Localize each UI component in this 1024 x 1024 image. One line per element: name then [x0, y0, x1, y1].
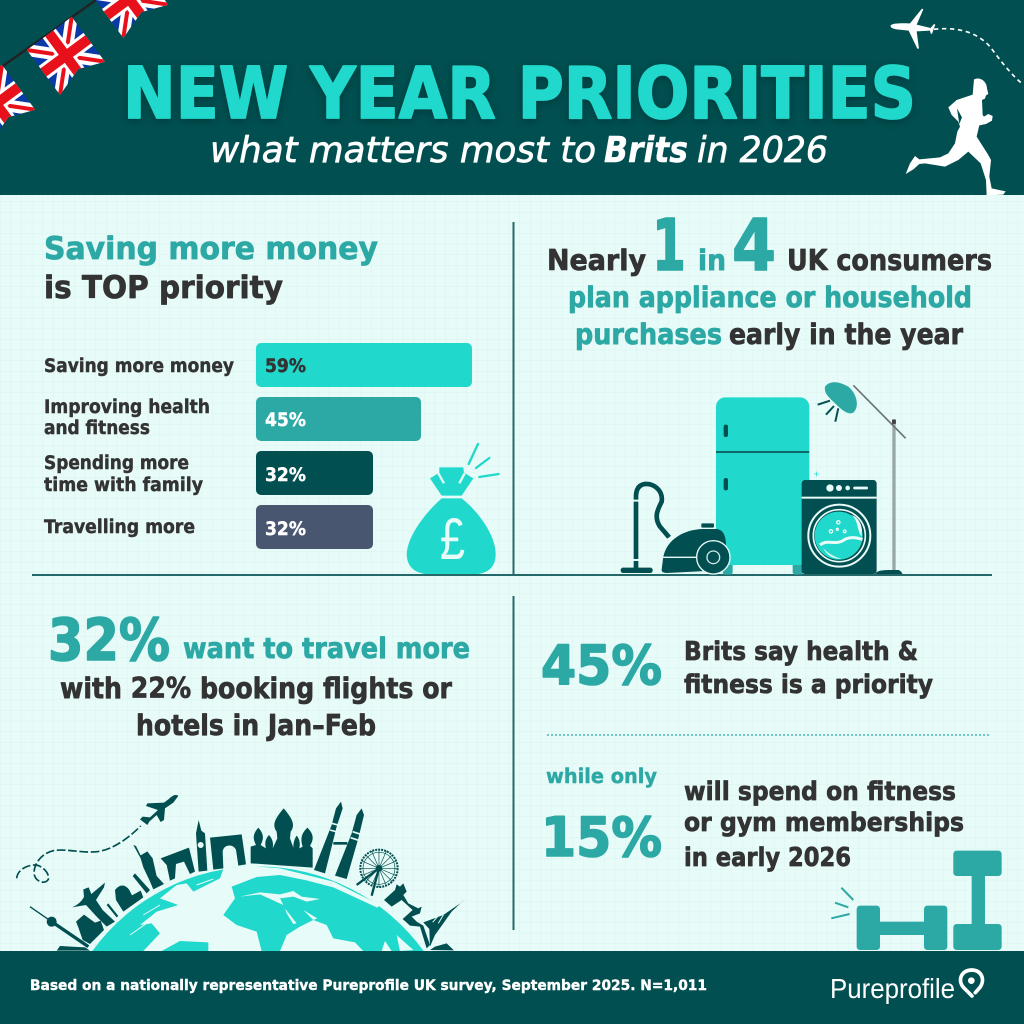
- panel: fitness stats: Brits say health &: [684, 637, 918, 667]
- panel: appliance headline: Nearly: [547, 244, 646, 277]
- panel: fitness stats: [541, 634, 990, 873]
- heading: saving more money: [44, 231, 378, 306]
- heading: saving more money: Saving more money: [44, 231, 378, 267]
- panel: fitness stats: 15%: [541, 806, 662, 869]
- bar chart: Spending more: [44, 453, 189, 474]
- panel: travel stat: 32%: [48, 606, 170, 674]
- panel: fitness stats: will spend on fitness: [684, 777, 956, 807]
- bar chart: time with family: [44, 475, 203, 496]
- panel: appliance headline: early in the year: [729, 318, 963, 351]
- panel: travel stat: with 22% booking flights or: [60, 672, 452, 705]
- panel: travel stat: hotels in Jan–Feb: [136, 709, 376, 742]
- icon: airplane and dotted trail: [891, 9, 1022, 83]
- icon: washing machine: [802, 472, 877, 574]
- panel: fitness stats: 45%: [541, 634, 662, 697]
- logo: Pureprofile: Pureprofile: [830, 973, 955, 1004]
- heading: saving more money: is TOP priority: [44, 270, 283, 306]
- landmarks: arch, kremlin, towers, ferris wheel, eiffel: [210, 802, 465, 950]
- bar chart: and fitness: [44, 418, 150, 439]
- icon: dark plane and dashed route: [17, 795, 178, 882]
- icon: dumbbells: [831, 851, 1002, 950]
- icon: running man: [906, 79, 1006, 195]
- panel: appliance headline: [547, 204, 992, 351]
- subtitle: in 2026: [697, 130, 828, 171]
- bar chart: Travelling more: [44, 517, 195, 538]
- subtitle: [210, 130, 828, 171]
- footer source note: Based on a nationally representative Pureprofile UK survey, September 2025. N=1,011: [30, 978, 707, 994]
- panel: fitness stats: in early 2026: [684, 843, 851, 873]
- illustration: globe: [92, 866, 424, 951]
- icon: vacuum cleaner: [621, 484, 730, 574]
- header band: [0, 0, 1024, 195]
- subtitle: what matters most to: [210, 130, 596, 171]
- icon: money bag: £: [440, 507, 465, 572]
- panel: appliance headline: plan appliance or household: [568, 281, 972, 314]
- bar chart: [44, 343, 472, 549]
- panel: travel stat: [48, 606, 470, 742]
- panel: fitness stats: fitness is a priority: [684, 670, 933, 700]
- panel: travel stat: want to travel more: [183, 632, 470, 665]
- bar chart: 45%: [265, 410, 306, 431]
- panel: top priority: [44, 231, 499, 574]
- bar chart: 32%: [265, 465, 306, 486]
- title: NEW YEAR PRIORITIES: [123, 52, 916, 135]
- panel: appliance headline: 4: [732, 204, 776, 287]
- icon: money bag: [407, 444, 499, 574]
- bar chart: 59%: [265, 356, 306, 377]
- bar chart: Improving health: [44, 397, 210, 418]
- footer band: [0, 951, 1024, 1024]
- subtitle: Brits: [604, 130, 688, 171]
- bar chart: 32%: [265, 519, 306, 540]
- bar chart: Saving more money: [44, 356, 234, 377]
- panel: fitness stats: or gym memberships: [684, 808, 964, 838]
- landmarks: left skyline: [30, 820, 207, 951]
- panel: appliance headline: 1: [652, 204, 686, 287]
- illustration: household appliances: [621, 382, 906, 575]
- panel: appliance headline: in: [698, 244, 726, 277]
- bunting flags: [0, 0, 168, 143]
- panel: fitness stats: while only: [546, 764, 657, 788]
- icon: floor lamp: [818, 382, 906, 574]
- divider lines: [32, 222, 992, 930]
- panel: appliance headline: UK consumers: [787, 244, 992, 277]
- icon: fridge: [716, 397, 809, 575]
- panel: appliance headline: purchases: [575, 318, 722, 351]
